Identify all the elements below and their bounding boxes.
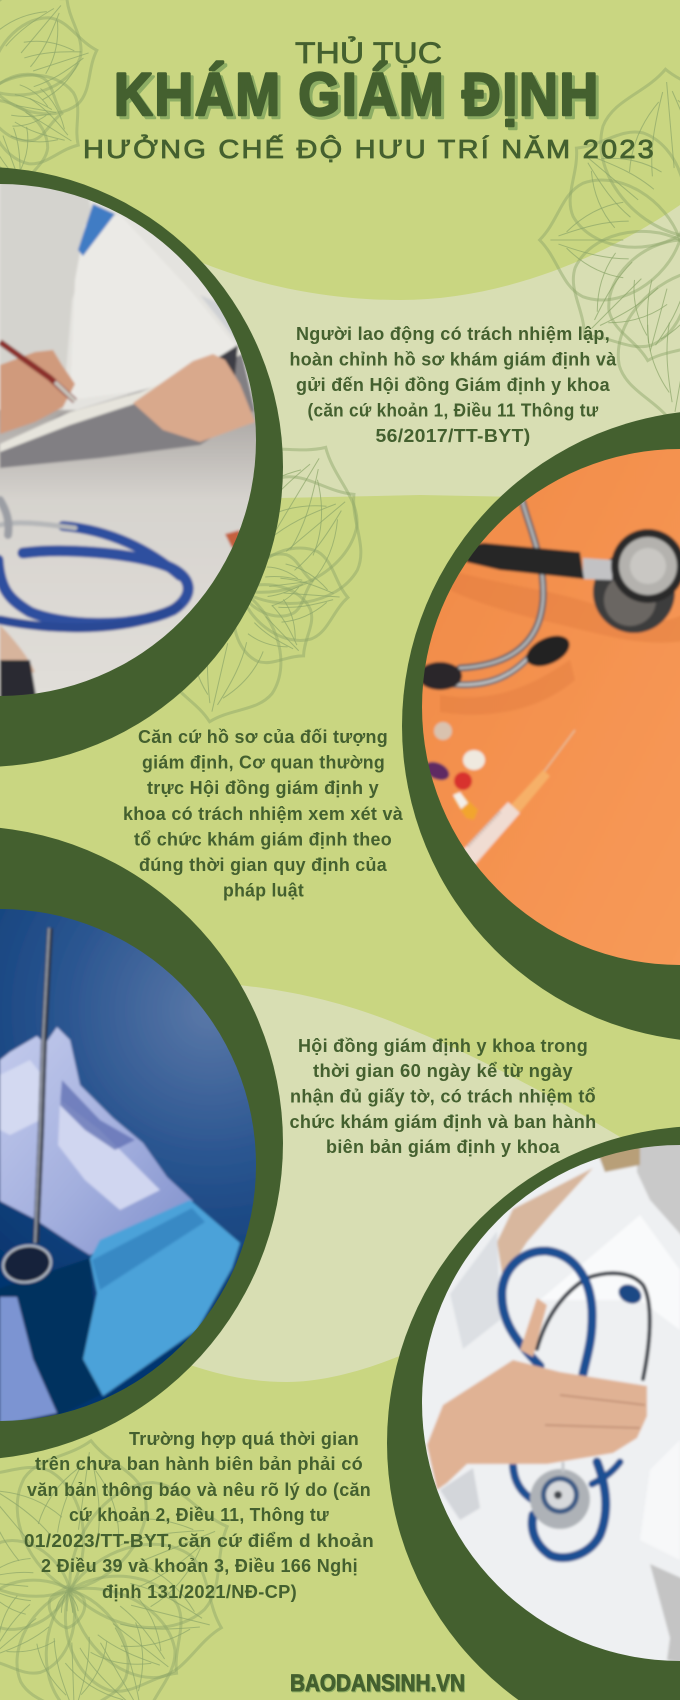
decorative flower: top right (539, 63, 680, 435)
text block: step 4: cứ khoản 2, Điều 11, Thông tư (69, 1505, 330, 1525)
text block: step 4: 2 Điều 39 và khoản 3, Điều 166 Nghị (41, 1556, 358, 1576)
text block: step 4: định 131/2021/NĐ-CP) (102, 1582, 297, 1602)
text block: step 1: hoàn chỉnh hồ sơ khám giám định và (290, 350, 617, 370)
text block: step 3: biên bản giám định y khoa (326, 1137, 561, 1157)
text block: step 4: 01/2023/TT-BYT, căn cứ điểm d khoản (24, 1531, 374, 1551)
photo: doctor writing on clipboard (0, 180, 270, 710)
photo: stethoscope and pills on orange (418, 445, 680, 970)
text block: step 1 (290, 324, 617, 446)
text block: step 1: Người lao động có trách nhiệm lập, (296, 324, 610, 344)
text block: step 1: gửi đến Hội đồng Giám định y khoa (296, 375, 611, 395)
decorative flower: top left (0, 0, 112, 202)
text block: step 2: tổ chức khám giám định theo (134, 829, 392, 849)
pale panel: middle (180, 982, 625, 1382)
text block: step 4: Trường hợp quá thời gian (129, 1429, 359, 1449)
photo: doctor holding stethoscope (420, 1140, 680, 1670)
text block: step 2 (123, 727, 404, 901)
pale panel: top (200, 205, 680, 500)
text block: step 2: pháp luật (223, 881, 304, 901)
source logo: BAODANSINH.VN (290, 1670, 465, 1697)
photo ring: orange stethoscope (402, 410, 680, 1042)
text block: step 4 (24, 1429, 374, 1602)
text block: step 3: Hội đồng giám định y khoa trong (298, 1036, 588, 1056)
text block: step 3: thời gian 60 ngày kể từ ngày (313, 1061, 573, 1081)
title: KHÁM GIÁM ĐỊNH: KHÁM GIÁM ĐỊNH (114, 61, 600, 128)
title: THỦ TỤC: THỦ TỤC (295, 36, 442, 70)
photo ring: doctor with clipboard (0, 167, 283, 767)
text block: step 1: 56/2017/TT-BYT) (376, 426, 530, 446)
text block: step 3: nhận đủ giấy tờ, có trách nhiệm tổ (290, 1086, 596, 1106)
decorative flower: middle (153, 411, 395, 735)
text block: step 1: (căn cứ khoản 1, Điều 11 Thông tư (308, 400, 599, 420)
photo ring: gloved hand (0, 826, 283, 1460)
text block: step 3 (290, 1036, 596, 1157)
photo ring: doctor with stethoscope (387, 1126, 680, 1700)
subtitle: HƯỞNG CHẾ ĐỘ HƯU TRÍ NĂM 2023 (83, 133, 656, 164)
text block: step 3: chức khám giám định và ban hành (290, 1112, 596, 1132)
text block: step 2: giám định, Cơ quan thường (142, 753, 385, 773)
text block: step 2: trực Hội đồng giám định y (147, 778, 379, 798)
text block: step 4: trên chưa ban hành biên bản phải có (35, 1454, 363, 1474)
text block: step 2: Căn cứ hồ sơ của đối tượng (138, 727, 388, 747)
decorative flower: bottom left (0, 1432, 254, 1700)
text block: step 4: văn bản thông báo và nêu rõ lý do (căn (27, 1480, 371, 1500)
photo: gloved hand holding dental tool (0, 905, 260, 1425)
text block: step 2: khoa có trách nhiệm xem xét và (123, 804, 404, 824)
text block: step 2: đúng thời gian quy định của (139, 855, 388, 875)
